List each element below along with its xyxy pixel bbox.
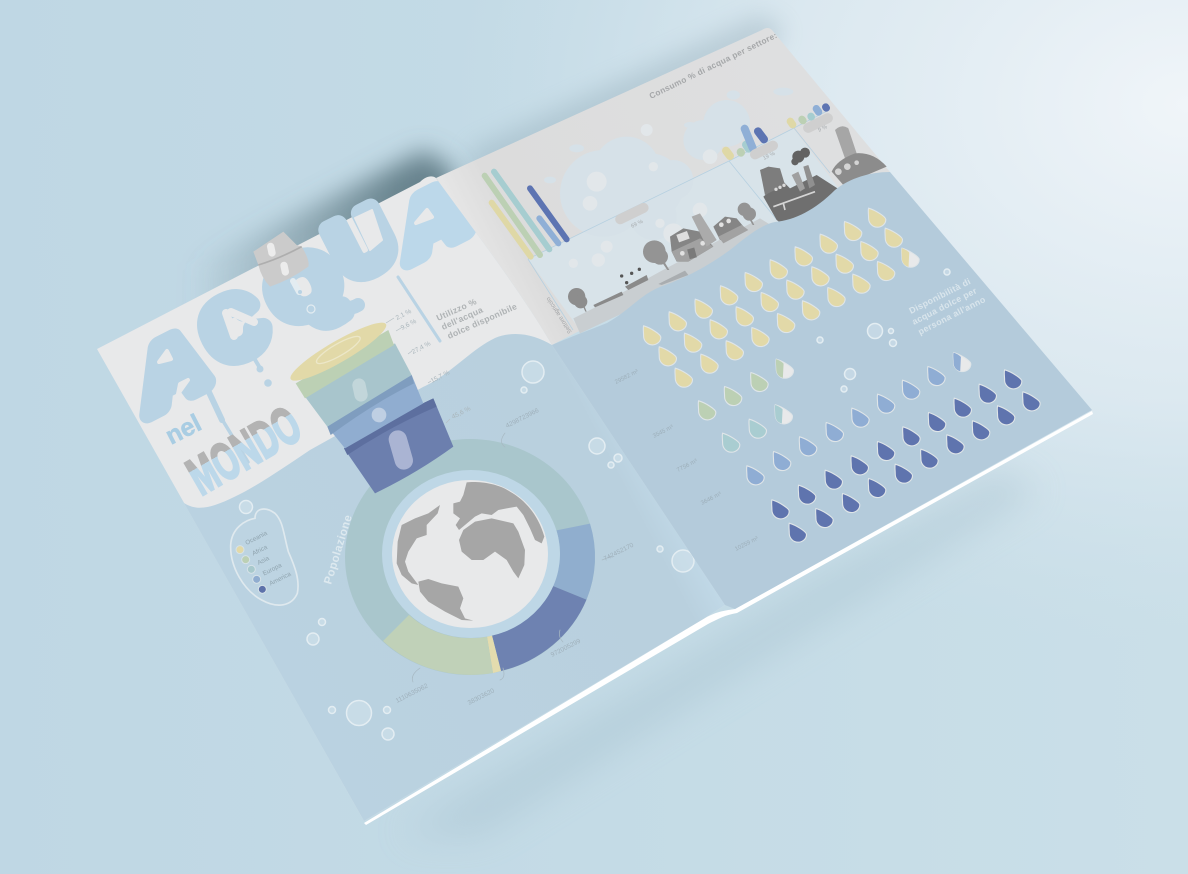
left page paper: [97, 176, 725, 821]
right page water: [552, 172, 1092, 609]
distant works: [832, 153, 887, 185]
smoke: [791, 148, 810, 165]
drop value labels: 7756 m³: [676, 458, 699, 474]
drop value labels: 3646 m³: [700, 491, 723, 507]
left page: [97, 164, 725, 821]
donut slice: Africa: [383, 615, 493, 675]
drop value labels: [614, 369, 760, 553]
legend labels: America: [268, 570, 293, 587]
distant tower: [835, 126, 857, 158]
cup segment: America: [344, 398, 453, 493]
legend labels: Oceania: [244, 530, 269, 547]
illustration: farmland: [568, 203, 773, 333]
magazine bottom edge: [364, 411, 1093, 825]
title ACQUA: U: [316, 191, 408, 296]
title ACQUA: A: [131, 310, 212, 431]
tree: [738, 203, 756, 225]
sector percentages: 9 %: [817, 124, 828, 134]
barn: [670, 228, 713, 262]
drops: Oceania: [643, 208, 919, 387]
stacked cup chart: [285, 315, 453, 493]
donut slice: America: [492, 586, 586, 671]
legend labels: Europa: [262, 562, 284, 577]
heading: water availability: [907, 276, 987, 337]
donut slice: Oceania: [487, 636, 501, 673]
donut value labels: 1110635062: [395, 682, 430, 705]
bar chart: domestic: [726, 129, 764, 156]
cup segment: Africa: [296, 330, 394, 398]
crops: [593, 292, 623, 307]
legend blob: [231, 509, 298, 605]
cup segment: Asia: [305, 343, 412, 427]
cup percentage labels: 45,6 %: [451, 405, 472, 421]
right page paper: [436, 28, 890, 345]
heading: water availability: Disponibilità di: [907, 276, 972, 316]
donut slice: Asia: [345, 439, 595, 675]
drops: America: [772, 370, 1040, 542]
sector percentages: [630, 124, 828, 230]
heading: water availability: acqua dolce per: [910, 285, 979, 327]
heading: consumption by sector: Consumo % di acqua per settore:: [647, 30, 779, 101]
globe continents: [397, 482, 544, 621]
cup percentage labels: [386, 308, 472, 423]
cup percentage labels: 2,1 %: [395, 308, 413, 322]
factory mass: [763, 175, 842, 225]
donut slice: Europa: [553, 524, 595, 600]
heading: freshwater use: dolce disponibile: [446, 301, 519, 341]
sector percentages: 69 %: [630, 219, 644, 230]
left page water: [184, 334, 725, 821]
cup segment: Europa: [327, 375, 423, 448]
heading: freshwater use: Utilizzo %: [435, 296, 478, 323]
right page bubbles: [817, 269, 950, 392]
legend labels: Africa: [251, 544, 269, 557]
cup segment: Oceania: [285, 315, 391, 388]
title drips: [207, 277, 440, 462]
heading: water availability: persona all'anno: [916, 294, 987, 337]
silo: [692, 213, 717, 247]
donut inner ring: [382, 470, 560, 638]
clouds: [528, 88, 840, 330]
title counters: [159, 210, 432, 394]
ground: [573, 218, 773, 333]
donut value labels: 38303620: [467, 687, 496, 707]
legend labels: [244, 530, 293, 587]
cup highlights: [351, 377, 369, 403]
drops: Asia: [722, 405, 792, 452]
sector percentages: 19 %: [762, 151, 776, 162]
drop value labels: 29582 m³: [614, 369, 640, 386]
donut chart: population: [345, 439, 595, 675]
donut value labels: 972005299: [550, 638, 582, 659]
title ACQUA: C: [188, 276, 280, 381]
word nel: nel: [161, 409, 206, 450]
word MONDO: MONDO: [178, 396, 311, 507]
legend swatches: [236, 546, 266, 593]
barn: [713, 217, 748, 243]
drop value labels: 10259 m³: [734, 536, 760, 553]
left page bubbles: [240, 361, 694, 740]
right page: [436, 28, 1092, 609]
drops: Africa: [698, 359, 793, 420]
legend: [231, 509, 298, 605]
cup percentage labels: 27,4 %: [411, 340, 432, 356]
sector frame lines: [528, 110, 830, 330]
tree: [643, 240, 669, 270]
drops: Europa: [747, 352, 971, 485]
sector labels: [614, 111, 835, 226]
bar chart: industry: [790, 107, 826, 125]
title ACQUA: [131, 164, 472, 431]
title ACQUA: A: [392, 164, 472, 278]
factory details: [773, 192, 815, 210]
globe: [392, 480, 548, 628]
title ACQUA: Q: [252, 231, 354, 342]
chimneys: [792, 172, 805, 192]
pond: [658, 271, 688, 285]
donut value labels: 4298723966: [505, 407, 540, 430]
illustration: factories: [760, 126, 887, 225]
tree: [568, 288, 587, 312]
magazine shadows: [190, 15, 1040, 835]
pictogram: water drops: [643, 208, 1040, 542]
legend labels: Asia: [256, 555, 271, 567]
drop value labels: 3545 m³: [652, 424, 675, 440]
factory tower: [760, 167, 785, 195]
heading: freshwater use: dell'acqua: [440, 305, 485, 332]
bar chart: agriculture: [485, 172, 567, 257]
rotated sector caption: Settore agricolo: [545, 295, 574, 334]
donut value labels: [395, 407, 635, 707]
cup percentage labels: 15,7 %: [430, 369, 451, 385]
icon: faucet: [253, 232, 309, 287]
label: popolazione: Popolazione: [322, 513, 355, 586]
cup percentage labels: 9,6 %: [400, 318, 418, 332]
donut value labels: 742452170: [603, 542, 635, 563]
